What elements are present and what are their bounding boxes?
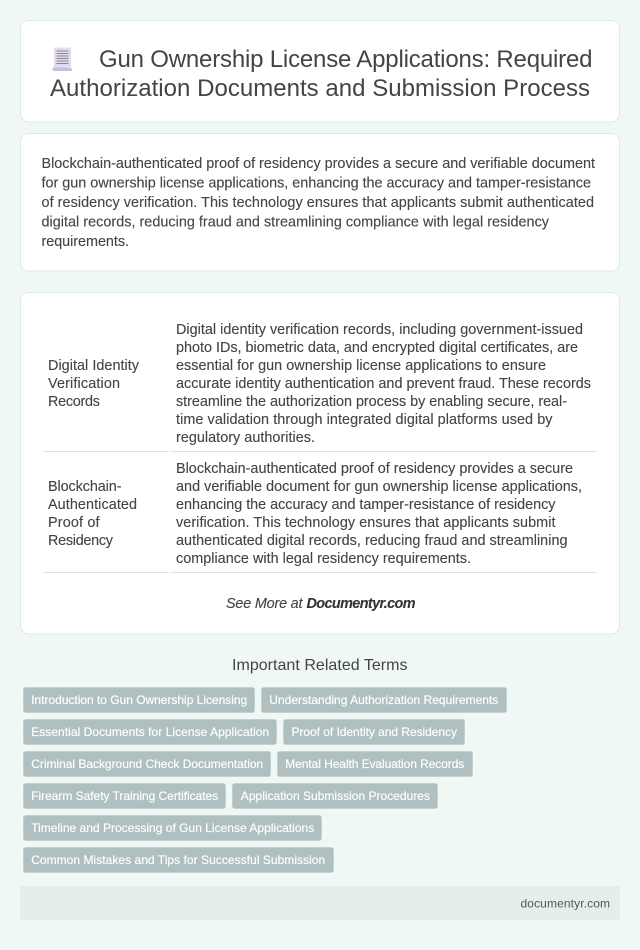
- summary text: [42, 156, 595, 250]
- summary text: Blockchain-authenticated proof of residency provides a secure and verifiable document: [42, 156, 595, 172]
- heading: important related terms: Important Related Terms: [232, 657, 408, 674]
- tag: [24, 784, 226, 808]
- tag: [24, 752, 270, 776]
- related terms tags: [24, 688, 506, 872]
- footer text: documentyr.com: [520, 896, 610, 910]
- tag: [262, 688, 506, 712]
- row label: Blockchain-: [48, 479, 122, 495]
- tag: [278, 752, 472, 776]
- title: Authorization Documents and Submission Process: [50, 75, 590, 102]
- row description: streamline the authorization process by enabling secure, real-: [176, 394, 567, 410]
- tag: [232, 784, 438, 808]
- row description: accurate identity authentication and prevent fraud. These records: [176, 376, 591, 392]
- row label: Digital Identity: [48, 358, 140, 374]
- summary text: of residency verification. This technology ensures that applicants submit authenticated: [42, 195, 594, 211]
- tag: Proof of Identity and Residency: [292, 725, 457, 739]
- tag: [24, 816, 322, 840]
- tag: Application Submission Procedures: [241, 789, 430, 803]
- table row: Digital Identity Verification Records: [43, 322, 597, 452]
- row description: and verifiable document for gun ownership license applications,: [176, 479, 582, 495]
- row label: [48, 479, 137, 549]
- row description: authenticated digital records, reducing fraud and streamlining: [176, 533, 568, 549]
- row label: Proof of: [48, 515, 100, 531]
- row description: verification. This technology ensures that applicants submit: [176, 515, 556, 531]
- tag: Understanding Authorization Requirements: [269, 693, 498, 707]
- row description: time validation through integrated digital platforms used by: [176, 412, 553, 428]
- tag: Criminal Background Check Documentation: [31, 757, 263, 771]
- row description: essential for gun ownership license applications to ensure: [176, 358, 546, 374]
- panel: title card: [20, 20, 620, 122]
- row description: Digital identity verification records, including government-issued: [176, 322, 583, 338]
- footer bar: [20, 886, 620, 920]
- tag: Common Mistakes and Tips for Successful Submission: [31, 853, 325, 867]
- tag: Introduction to Gun Ownership Licensing: [31, 693, 247, 707]
- tag: [24, 688, 254, 712]
- row label: Authenticated: [48, 497, 137, 513]
- tag: Firearm Safety Training Certificates: [31, 789, 218, 803]
- row description: compliance with legal residency requirements.: [176, 551, 471, 567]
- row description: Blockchain-authenticated proof of residency provides a secure: [176, 461, 573, 477]
- icon: receipt document: [52, 48, 72, 71]
- tag: [24, 720, 276, 744]
- tag: Essential Documents for License Application: [31, 725, 269, 739]
- title: Gun Ownership License Applications: Required: [99, 46, 592, 73]
- row label: Verification: [48, 376, 120, 392]
- row description: photo IDs, biometric data, and encrypted digital certificates, are: [176, 340, 578, 356]
- see more link: Documentyr.com: [306, 596, 416, 612]
- row description: [176, 461, 582, 567]
- panel: documents table card: [20, 292, 620, 634]
- tag: Mental Health Evaluation Records: [285, 757, 464, 771]
- summary text: for gun ownership license applications, enhancing the accuracy and tamper-resistance: [42, 176, 591, 192]
- see more link: [226, 596, 416, 612]
- summary text: digital records, reducing fraud and streamlining compliance with legal residency: [42, 214, 550, 230]
- table row: Blockchain-Authenticated Proof of Residency: [43, 461, 597, 573]
- tag: Timeline and Processing of Gun License Applications: [31, 821, 314, 835]
- summary text: requirements.: [42, 234, 129, 250]
- tag: [284, 720, 464, 744]
- row description: [176, 322, 591, 446]
- row label: Records: [48, 394, 100, 410]
- see more link: See More at: [226, 596, 304, 612]
- row description: regulatory authorities.: [176, 430, 315, 446]
- row label: Residency: [48, 533, 114, 549]
- title: [50, 46, 592, 102]
- tag: [24, 848, 334, 872]
- panel: summary card: [20, 134, 620, 271]
- row label: [48, 358, 140, 410]
- row description: enhancing the accuracy and tamper-resistance of residency: [176, 497, 556, 513]
